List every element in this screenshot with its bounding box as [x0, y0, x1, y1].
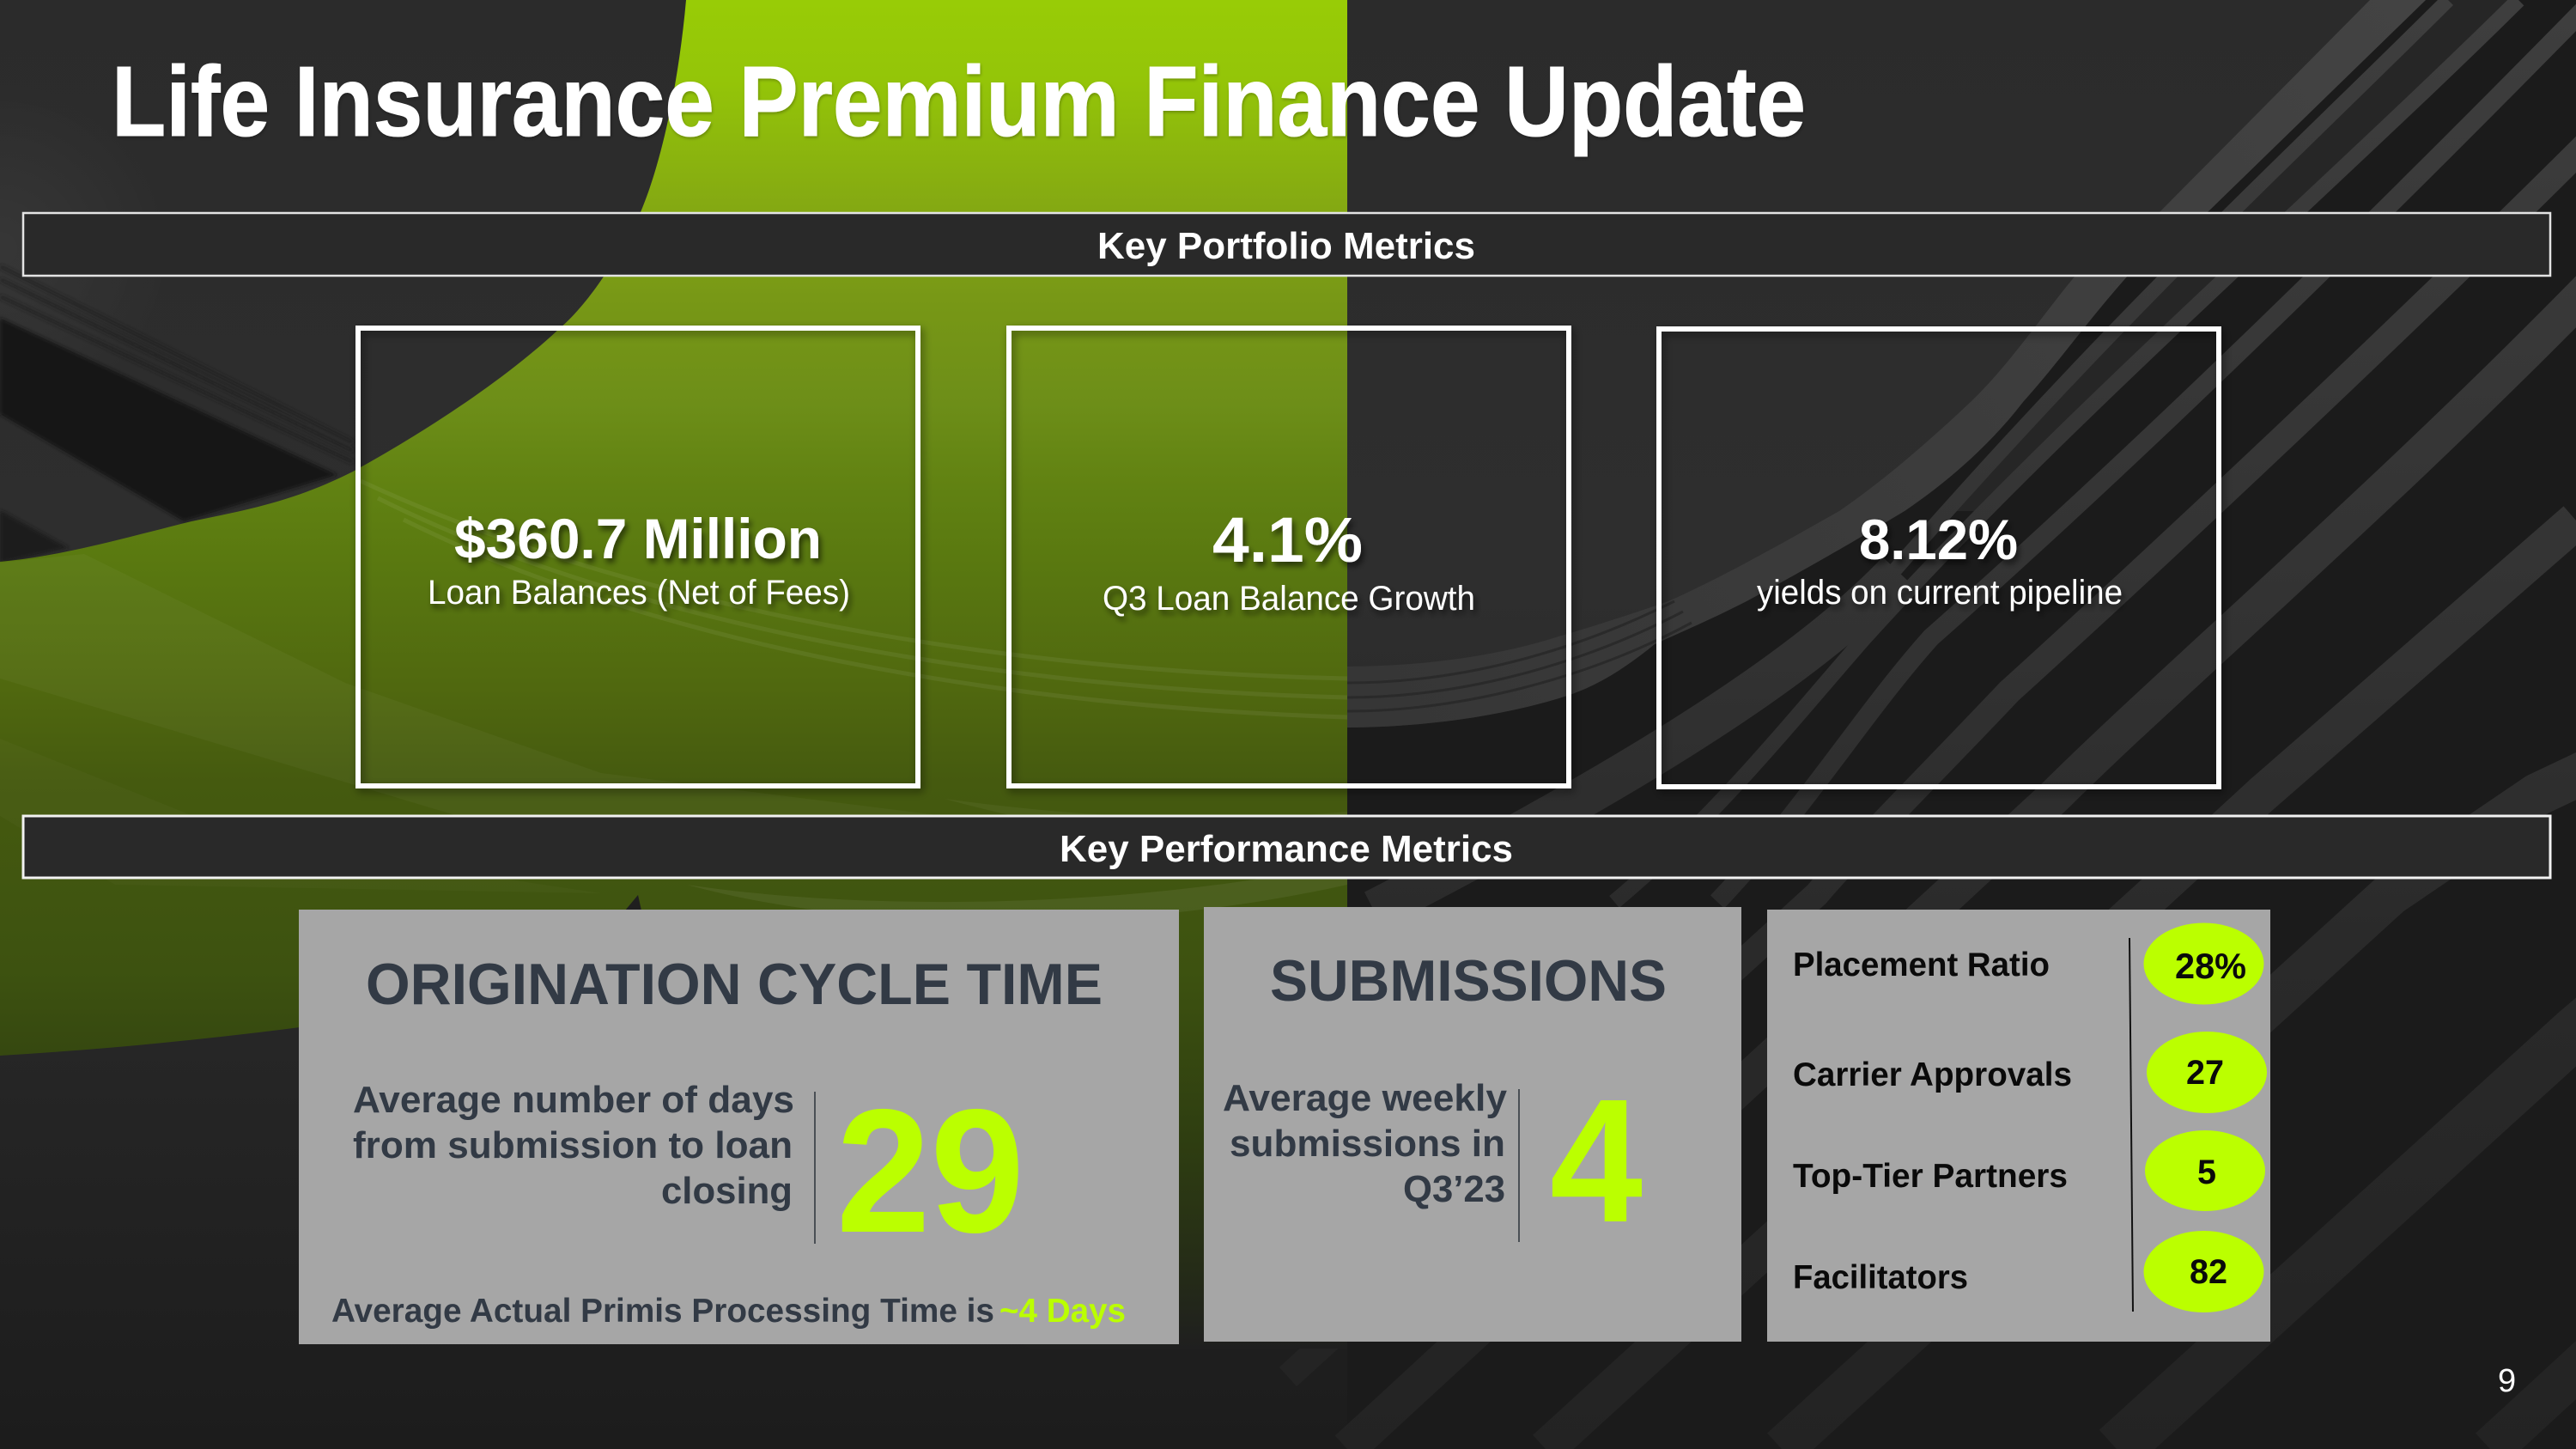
- stat: carrier approvals: [1793, 1032, 2267, 1113]
- metric box: loan balance growth: Q3 Loan Balance Growth: [1103, 580, 1475, 618]
- green shape: [0, 0, 1347, 1349]
- metric box: loan balance growth: 4.1%: [1212, 504, 1363, 575]
- panel: submissions: submissions in: [1230, 1123, 1505, 1165]
- metric box: pipeline yields: [1659, 329, 2219, 787]
- metric box: pipeline yields: 8.12%: [1859, 508, 2018, 571]
- title: Life Insurance Premium Finance Update: [112, 46, 1806, 157]
- panel: submissions: SUBMISSIONS: [1270, 948, 1667, 1014]
- metric box: loan balances: $360.7 Million: [454, 507, 822, 570]
- stat: facilitators: [1793, 1231, 2263, 1312]
- metric box: loan balances: Loan Balances (Net of Fees): [428, 574, 850, 612]
- panel: submissions: [1204, 907, 1741, 1342]
- panel: origination cycle time: ~4 Days: [999, 1293, 1126, 1330]
- section bar: key portfolio metrics: [23, 213, 2550, 276]
- stat: top-tier partners: [1793, 1130, 2265, 1211]
- panel: origination cycle time: Average number of days: [353, 1079, 794, 1121]
- panel: submissions: Average weekly: [1223, 1077, 1508, 1119]
- section bar: key performance metrics: Key Performance Metrics: [1060, 828, 1513, 870]
- stat: placement ratio: Placement Ratio: [1793, 947, 2050, 983]
- section bar: key performance metrics: [23, 816, 2550, 878]
- stat: placement ratio: 28%: [2175, 946, 2246, 986]
- stat: top-tier partners: 5: [2197, 1154, 2216, 1191]
- stat: facilitators: Facilitators: [1793, 1259, 1968, 1296]
- metric box: pipeline yields: yields on current pipeline: [1757, 574, 2123, 612]
- panel: origination cycle time: ORIGINATION CYCLE TIME: [366, 952, 1103, 1017]
- stat: top-tier partners: Top-Tier Partners: [1793, 1158, 2068, 1195]
- stat: carrier approvals: 27: [2186, 1054, 2224, 1092]
- page number: 9: [2498, 1363, 2516, 1399]
- panel: origination cycle time: Average Actual Primis Processing Time is: [331, 1293, 994, 1330]
- metric box: loan balances: [358, 328, 918, 786]
- panel: origination cycle time: [299, 910, 1179, 1344]
- stat: facilitators: 82: [2190, 1253, 2227, 1291]
- metric box: loan balance growth: [1009, 328, 1569, 786]
- stat: placement ratio: [1793, 922, 2263, 1005]
- stat: carrier approvals: Carrier Approvals: [1793, 1056, 2072, 1093]
- panel: origination cycle time: 29: [836, 1073, 1024, 1269]
- panel: submissions: Q3’23: [1403, 1168, 1505, 1210]
- panel: origination cycle time: from submission to loan: [353, 1124, 793, 1166]
- panel: submissions: 4: [1550, 1062, 1643, 1259]
- panel: partner statistics: [1767, 910, 2270, 1342]
- section bar: key portfolio metrics: Key Portfolio Metrics: [1097, 225, 1475, 267]
- panel: origination cycle time: closing: [661, 1170, 793, 1212]
